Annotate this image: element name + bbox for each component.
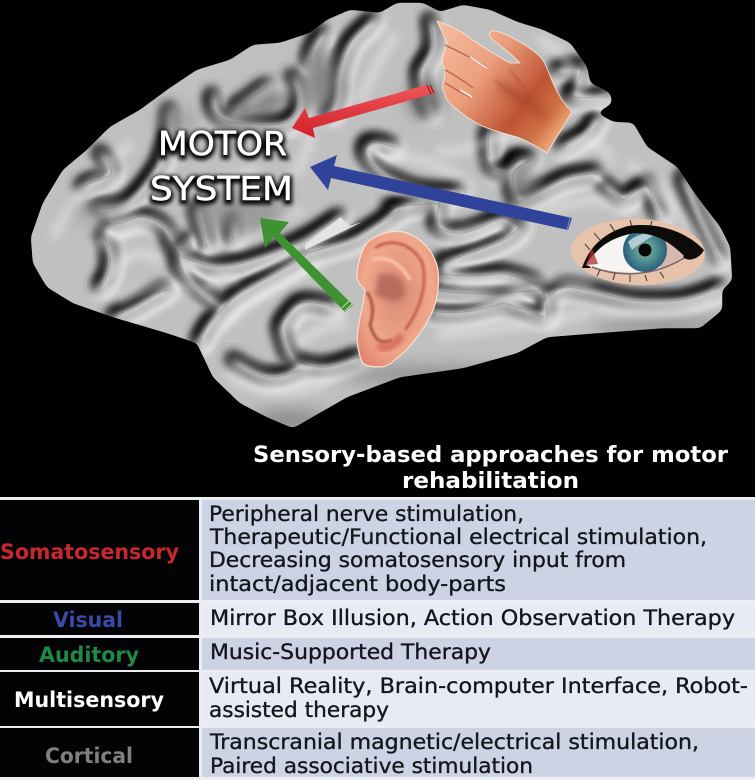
row: auditory: Music-Supported Therapy [210, 640, 491, 664]
row: multisensory: assisted therapy [209, 698, 389, 722]
sylvian fissure strip [305, 217, 362, 250]
arrow: green auditory [260, 218, 353, 312]
row: somatosensory: Therapeutic/Functional electrical stimulation, [209, 525, 707, 549]
label: motor system: SYSTEM [150, 169, 293, 208]
label: motor system: MOTOR [158, 126, 287, 165]
row: cortical: Transcranial magnetic/electrical stimulation, [209, 730, 699, 754]
icon: eye [570, 217, 706, 287]
row: cortical: Cortical [45, 744, 133, 768]
table [0, 497, 755, 780]
title: rehabilitation [402, 469, 579, 494]
row: somatosensory: Decreasing somatosensory input from [209, 548, 626, 572]
row: auditory: Auditory [39, 643, 139, 667]
title [253, 443, 728, 494]
row: somatosensory: Peripheral nerve stimulation, [209, 502, 524, 526]
icon: hand [437, 21, 572, 153]
label: motor system: MOTOR [158, 124, 287, 163]
arrow: blue visual [310, 155, 572, 230]
label: motor system: SYSTEM [150, 171, 293, 210]
row: visual: Mirror Box Illusion, Action Observation Therapy [210, 606, 735, 630]
row: multisensory [0, 672, 755, 726]
icon: ear [357, 232, 439, 367]
row: multisensory: Virtual Reality, Brain-computer Interface, Robot- [209, 674, 748, 698]
arrow: red somatosensory [292, 85, 435, 138]
row: auditory [0, 638, 755, 670]
row: cortical: Paired associative stimulation [210, 754, 533, 778]
row: somatosensory: intact/adjacent body-parts [209, 572, 506, 596]
label: motor system [150, 124, 293, 210]
row: visual: Visual [53, 608, 123, 632]
row: visual [0, 603, 755, 635]
title: Sensory-based approaches for motor [253, 443, 728, 468]
row: multisensory: Multisensory [14, 688, 164, 712]
brain illustration [55, 20, 730, 429]
row: somatosensory [0, 500, 755, 600]
row: somatosensory: Somatosensory [0, 540, 179, 564]
row: cortical [0, 728, 755, 778]
